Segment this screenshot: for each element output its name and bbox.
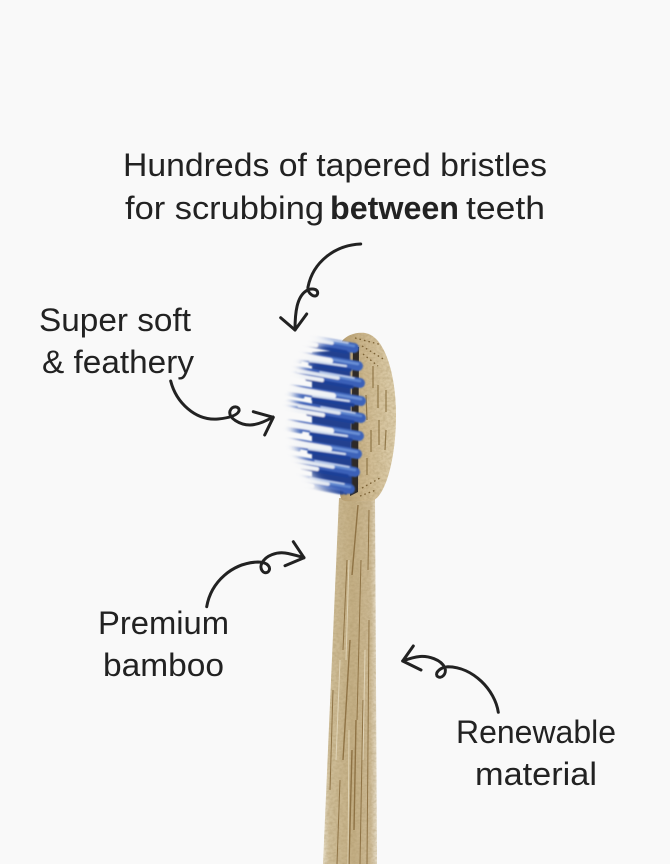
label: super soft: [39, 302, 194, 380]
label: premium bamboo: [98, 605, 229, 683]
bamboo handle: [323, 498, 377, 864]
heading: for scrubbing: [125, 190, 324, 226]
label: renewable material: Renewable: [456, 714, 616, 750]
bristles: [286, 336, 367, 496]
arrow: premium bamboo to handle: [207, 542, 304, 607]
heading: teeth: [466, 190, 545, 226]
dark bristle base: [350, 347, 359, 496]
heading: between: [330, 190, 459, 226]
label: premium bamboo: bamboo: [103, 647, 224, 683]
heading: Hundreds of tapered bristles: [123, 147, 547, 183]
heading: [123, 147, 547, 226]
arrow: renewable material to handle: [403, 646, 498, 712]
bamboo head: [340, 332, 396, 501]
label: renewable material: [456, 714, 616, 792]
arrow: heading to bristles: [281, 244, 361, 330]
arrow: super soft to bristles: [171, 381, 273, 435]
label: renewable material: material: [475, 756, 597, 792]
label: super soft: & feathery: [42, 344, 194, 380]
label: super soft: Super soft: [39, 302, 191, 338]
toothbrush: [286, 332, 396, 864]
label: premium bamboo: Premium: [98, 605, 229, 641]
